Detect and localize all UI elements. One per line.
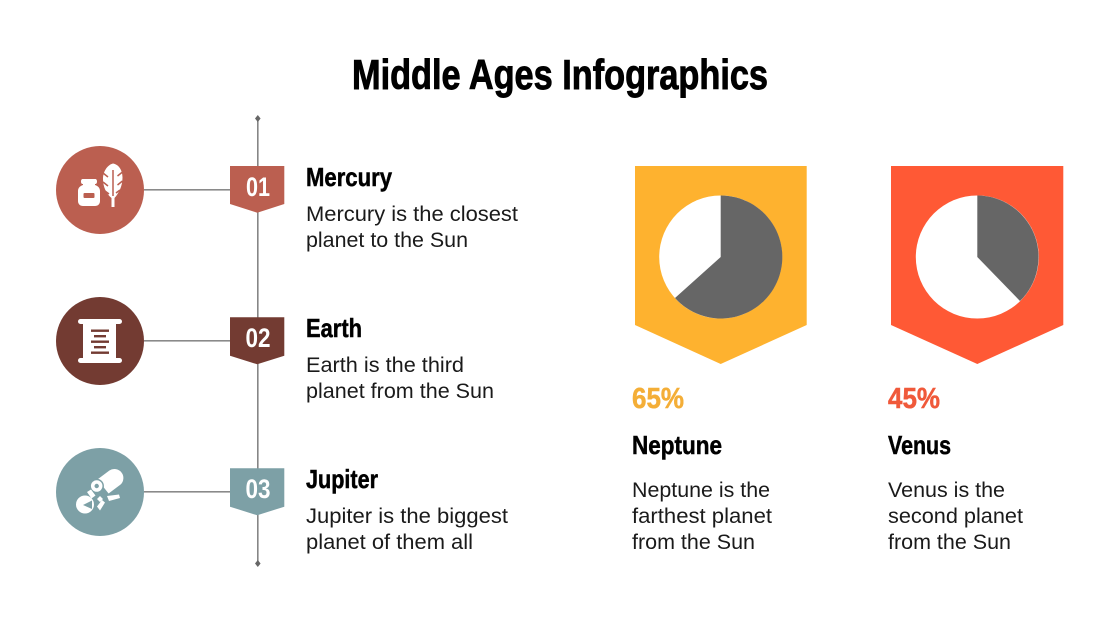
badge 02 — [230, 317, 284, 364]
timeline item: Jupiter — [56, 448, 508, 554]
icon: scroll — [56, 297, 144, 385]
badge 02: 02 — [246, 323, 270, 353]
badge 01: 01 — [246, 172, 270, 202]
panel: Neptune — [632, 166, 807, 554]
description Neptune: farthest planet — [632, 504, 772, 528]
badge 03 — [230, 468, 284, 515]
title: Middle Ages Infographics — [352, 51, 768, 98]
badge 01 — [230, 166, 284, 213]
text: Mercury: Mercury — [306, 162, 392, 192]
description Venus — [888, 478, 1023, 554]
badge 03: 03 — [246, 474, 270, 504]
heading Venus: Venus — [888, 430, 951, 460]
icon: diploma — [56, 448, 144, 536]
description Neptune: from the Sun — [632, 530, 755, 554]
shield with pie chart 65% — [635, 166, 807, 364]
text: Mercury: planet to the Sun — [306, 228, 468, 252]
text: Jupiter: Jupiter — [306, 464, 378, 494]
description Neptune — [632, 478, 772, 554]
text: Earth: Earth — [306, 313, 362, 343]
description Venus: from the Sun — [888, 530, 1011, 554]
text: Mercury: Mercury is the closest — [306, 202, 518, 226]
connector 02 — [144, 340, 231, 342]
text: Mercury — [306, 162, 518, 252]
value 65%: 65% — [632, 383, 684, 415]
description Neptune: Neptune is the — [632, 478, 770, 502]
icon: ink bottle and quill — [56, 146, 144, 234]
text: Jupiter — [306, 464, 508, 554]
description Venus: second planet — [888, 504, 1023, 528]
connector 01 — [144, 189, 231, 191]
connector 03 — [144, 491, 231, 493]
timeline item: Earth — [56, 297, 494, 403]
text: Earth: planet from the Sun — [306, 379, 494, 403]
shield with pie chart 45% — [891, 166, 1063, 364]
text: Jupiter: planet of them all — [306, 530, 473, 554]
text: Earth — [306, 313, 494, 403]
value 45%: 45% — [888, 383, 940, 415]
description Venus: Venus is the — [888, 478, 1005, 502]
timeline axis — [255, 115, 261, 567]
text: Jupiter: Jupiter is the biggest — [306, 504, 508, 528]
panel: Venus — [888, 166, 1063, 554]
heading Neptune: Neptune — [632, 430, 722, 460]
timeline item: Mercury — [56, 146, 518, 252]
text: Earth: Earth is the third — [306, 353, 464, 377]
